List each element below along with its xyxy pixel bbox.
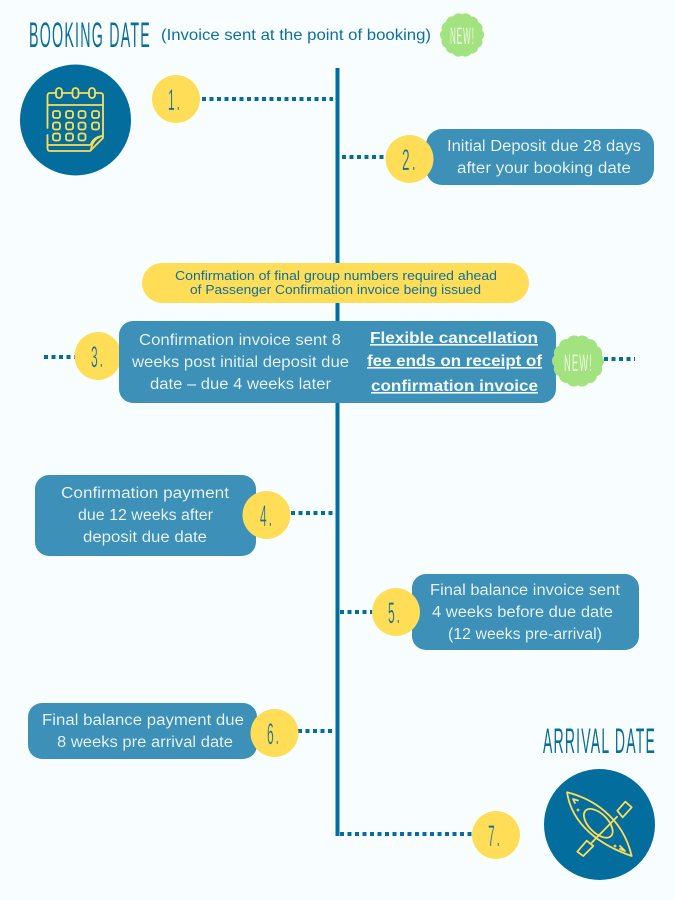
step 4 card: Confirmation payment [61, 485, 230, 502]
timeline spine [336, 68, 340, 836]
step 2 card [426, 129, 654, 185]
step 6 card: Final balance payment due [42, 712, 244, 729]
step 3 number: 3. [91, 341, 105, 374]
step 6 number [250, 709, 298, 757]
badge: new step 3 [560, 342, 596, 380]
step 2 number: 2. [402, 144, 418, 177]
step 7 connector [340, 832, 473, 836]
step 3 card: weeks post initial deposit due [131, 354, 349, 371]
step 3 number [74, 332, 122, 380]
text: BOOKING DATE [29, 16, 151, 55]
icon: calendar [20, 64, 131, 176]
text: NEW! [450, 23, 475, 50]
step 3 card: date – due 4 weeks later [150, 376, 331, 393]
step 3 card: Flexible cancellation [370, 330, 538, 347]
step 6 card: 8 weeks pre arrival date [57, 734, 233, 751]
text: NEW! [564, 350, 593, 377]
callout: final group numbers: of Passenger Confirmation invoice being issued [190, 283, 481, 297]
step 6 connector [298, 729, 335, 733]
step 2 number [386, 135, 434, 183]
step 7 number: 7. [488, 820, 502, 853]
step 4 card [35, 475, 256, 556]
step 3 right connector [604, 357, 635, 361]
step 4 number [242, 491, 290, 539]
step 3 card: fee ends on receipt of [367, 353, 543, 370]
step 6 card [28, 703, 257, 759]
step 4 card: due 12 weeks after [78, 507, 213, 524]
step 4 number: 4. [260, 500, 274, 533]
step 5 card: Final balance invoice sent [430, 582, 621, 599]
step 2 connector [342, 155, 388, 159]
step 5 card [412, 574, 639, 650]
step 5 number [372, 588, 420, 636]
step 3 left connector [44, 355, 75, 359]
step 5 card: 4 weeks before due date [432, 604, 613, 621]
step 4 connector [291, 511, 333, 515]
icon: kayak [544, 769, 655, 880]
step 1 number [152, 75, 200, 123]
step 6 number: 6. [267, 718, 281, 751]
callout: final group numbers [142, 263, 529, 303]
step 2 card: Initial Deposit due 28 days [447, 138, 641, 155]
subheading: invoice note: (Invoice sent at the point of booking) [161, 27, 431, 44]
step 5 number: 5. [388, 597, 402, 630]
step 4 card: deposit due date [83, 529, 207, 546]
callout: final group numbers: Confirmation of final group numbers required ahead [175, 269, 497, 283]
step 1 number: 1. [168, 84, 182, 117]
step 1 connector [202, 97, 333, 101]
step 5 card: (12 weeks pre-arrival) [448, 626, 602, 643]
step 3 card: confirmation invoice [371, 378, 538, 395]
step 3 card [119, 321, 556, 403]
step 7 number [472, 811, 520, 859]
step 5 connector [340, 610, 373, 614]
step 2 card: after your booking date [457, 160, 631, 177]
step 3 card: Confirmation invoice sent 8 [139, 332, 341, 349]
badge: new top [446, 20, 478, 50]
